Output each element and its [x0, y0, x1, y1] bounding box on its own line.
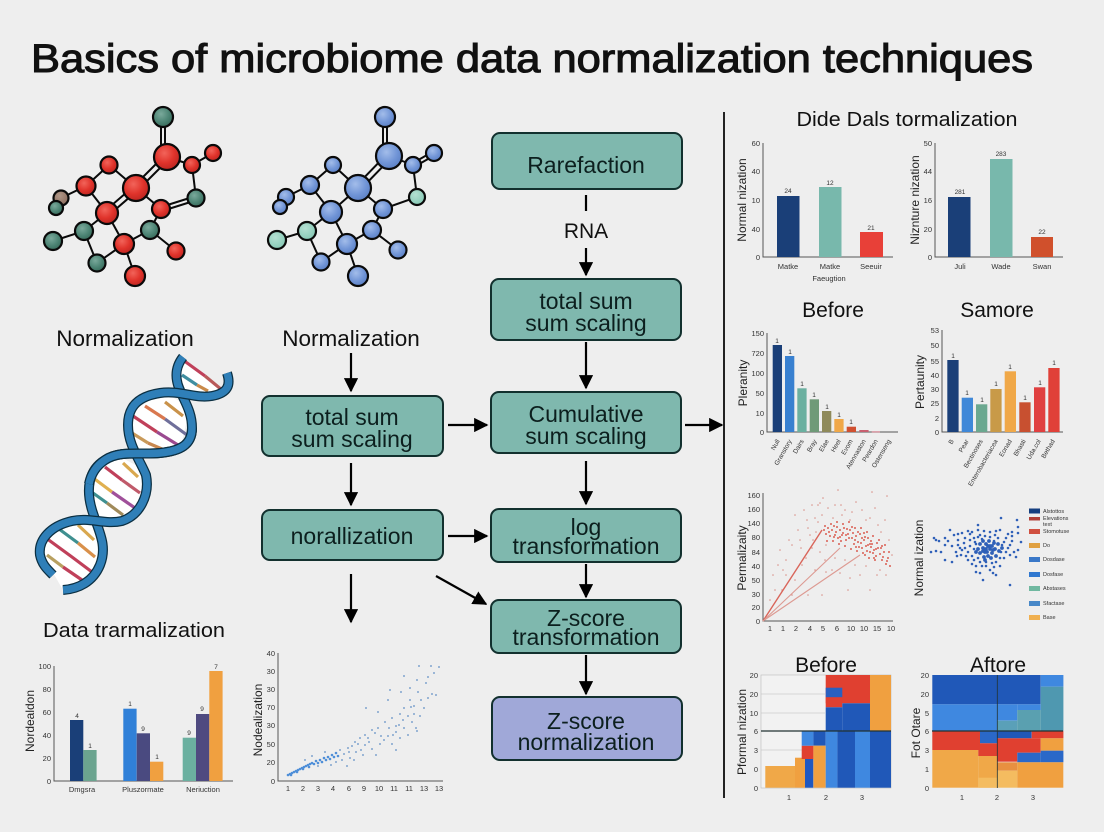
chart: red scatter with lines: 50 — [752, 576, 760, 585]
chart: samore bars: B — [947, 438, 956, 446]
heading: after heatmap: Aftore — [970, 654, 1026, 677]
flow box: log transformation — [491, 509, 681, 562]
chart: red scatter with lines: 1 — [781, 624, 785, 633]
heading: before: Before — [802, 299, 864, 322]
heading: normalization centre: Normalization — [282, 326, 420, 351]
chart: after heatmap: 1 — [960, 793, 964, 802]
chart: before heatmap: 3 — [754, 746, 758, 755]
icon: DNA double helix — [40, 357, 229, 590]
chart: samore bars: Enterobacteriacea — [967, 438, 1000, 488]
chart: red scatter with lines: 5 — [821, 624, 825, 633]
chart: before heatmap: 10 — [750, 709, 758, 718]
chart: samore bars: Uda.col — [1026, 438, 1043, 461]
chart: grouped bars: Pluszormate — [122, 785, 164, 794]
heading: before heatmap: Before — [795, 654, 857, 677]
chart: before bars: 720 — [751, 349, 764, 358]
chart: before heatmap: 20 — [750, 671, 758, 680]
chart: before heatmap: 1 — [787, 793, 791, 802]
chart: bottom scatter: 11 — [390, 784, 398, 793]
divider line — [723, 112, 725, 798]
y axis title: Permalizaity — [735, 525, 749, 591]
chart: samore bars: Pear — [958, 438, 971, 454]
heading: normalization left: Normalization — [56, 326, 194, 351]
chart: red scatter with lines: 20 — [752, 603, 760, 612]
chart: bottom scatter: 20 — [267, 758, 275, 767]
chart: red scatter with lines: 84 — [752, 548, 760, 557]
chart: top right bars: Juli — [954, 262, 966, 271]
chart: grouped bars: 7 — [214, 664, 218, 671]
chart: before bars — [736, 329, 898, 470]
chart: bottom scatter: 6 — [347, 784, 351, 793]
chart: grouped bars: 1 — [155, 754, 159, 761]
chart: before bars: 50 — [756, 389, 764, 398]
chart: top right bars — [908, 139, 1063, 271]
chart: grouped bars: 1 — [88, 743, 92, 750]
flow box: cumulative sum scaling: Cumulative — [528, 401, 644, 427]
chart: after heatmap: 0 — [925, 784, 929, 793]
chart: samore bars — [913, 326, 1063, 488]
chart: before bars: 10 — [756, 409, 764, 418]
flow box: z-score transformation — [491, 600, 681, 653]
chart: top left bars: 0 — [756, 253, 760, 262]
chart: before heatmap: 20 — [750, 690, 758, 699]
chart: samore bars: Eonad — [998, 438, 1014, 458]
chart: before bars: 0 — [760, 428, 764, 437]
flow box: total sum scaling right: total sum — [539, 288, 633, 314]
chart: grouped bars: 20 — [43, 754, 51, 763]
chart: blue cluster scatter with legend: Stomotuse — [1043, 529, 1069, 535]
flow box: log transformation: transformation — [512, 533, 660, 559]
chart: grouped bars: 0 — [47, 777, 51, 786]
flow box: z-score normalization: normalization — [518, 729, 654, 755]
chart: red scatter with lines: 160 — [747, 505, 760, 514]
flow box: z-score normalization — [492, 697, 682, 760]
chart: before heatmap: 0 — [754, 765, 758, 774]
chart: samore bars: 30 — [931, 385, 939, 394]
chart: before heatmap: 0 — [754, 784, 758, 793]
chart: before bars: Dairs — [792, 438, 806, 455]
chart: top right bars: 0 — [928, 253, 932, 262]
chart: blue cluster scatter with legend — [912, 508, 1069, 621]
y axis title: Pformal nization — [735, 689, 749, 775]
heading: samore: Samore — [960, 299, 1034, 322]
flow box: cumulative sum scaling — [491, 392, 681, 453]
chart: top right bars: 44 — [924, 167, 932, 176]
chart: bottom scatter: 13 — [435, 784, 443, 793]
chart: before bars: 150 — [751, 329, 764, 338]
chart: red scatter with lines: 1 — [768, 624, 772, 633]
chart: samore bars: 1 — [951, 353, 955, 360]
chart: red scatter with lines: 10 — [860, 624, 868, 633]
chart: after heatmap: 20 — [921, 690, 929, 699]
flow box: log transformation: log — [571, 514, 601, 540]
chart: red scatter with lines: 10 — [887, 624, 895, 633]
chart: before bars: 1 — [775, 338, 779, 345]
chart: before bars: 100 — [751, 369, 764, 378]
heading: right column: Dide Dals tormalization — [796, 109, 1018, 131]
chart: top left bars: 24 — [784, 188, 792, 195]
chart: samore bars: 1 — [994, 381, 998, 388]
chart: samore bars: 1 — [1052, 360, 1056, 367]
chart: bottom scatter: 30 — [267, 667, 275, 676]
chart: samore bars: 53 — [931, 326, 939, 335]
chart: top left bars: 21 — [867, 225, 875, 232]
chart: samore bars: 1 — [965, 390, 969, 397]
chart: top right bars: 50 — [924, 139, 932, 148]
chart: grouped bars: 60 — [43, 708, 51, 717]
y axis title: Pleranity — [736, 360, 750, 406]
icon: red and green molecule — [44, 107, 221, 286]
chart: top right bars: 20 — [924, 225, 932, 234]
chart: before bars: Elae — [818, 438, 831, 453]
chart: bottom scatter: 9 — [362, 784, 366, 793]
chart: before bars: 1 — [812, 392, 816, 399]
chart: before bars: 1 — [849, 419, 853, 426]
flow box: total sum scaling left — [262, 396, 443, 456]
chart: blue cluster scatter with legend: Dosfase — [1043, 572, 1063, 578]
chart: grouped bars: Neriuction — [186, 785, 220, 794]
chart: top right bars: 22 — [1038, 229, 1046, 236]
y axis title: Normal ization — [912, 520, 926, 596]
chart: after heatmap — [909, 671, 1063, 802]
y axis title: Niznture nization — [908, 155, 922, 245]
chart: grouped bars — [23, 662, 233, 794]
chart: red scatter with lines: 160 — [747, 491, 760, 500]
chart: after heatmap: 6 — [925, 727, 929, 736]
chart: samore bars: 50 — [931, 341, 939, 350]
chart: before bars: Null — [770, 438, 782, 452]
chart: top right bars: Wade — [991, 262, 1011, 271]
chart: top right bars: Swan — [1033, 262, 1051, 271]
chart: top left bars: 12 — [826, 180, 834, 187]
chart: before heatmap — [735, 671, 891, 802]
chart: top left bars: 40 — [752, 167, 760, 176]
chart: samore bars: 1 — [980, 397, 984, 404]
chart: red scatter with lines: 15 — [873, 624, 881, 633]
chart: bottom scatter: 0 — [271, 777, 275, 786]
flow box: z-score normalization: Z-score — [547, 708, 625, 734]
chart: top right bars: 16 — [924, 196, 932, 205]
chart: after heatmap: 2 — [995, 793, 999, 802]
chart: red scatter with lines: 80 — [752, 533, 760, 542]
chart: blue cluster scatter with legend: text — [1043, 522, 1052, 528]
chart: top left bars: Matke — [820, 262, 840, 271]
chart: samore bars: 0 — [935, 428, 939, 437]
chart: samore bars: 1 — [1023, 395, 1027, 402]
chart: before bars: Heel — [830, 438, 843, 454]
chart: before bars: 1 — [788, 349, 792, 356]
chart: red scatter with lines: 10 — [847, 624, 855, 633]
chart: before bars: Evom — [840, 438, 855, 456]
flow box: total sum scaling left: total sum — [305, 404, 399, 430]
chart: red scatter with lines: 30 — [752, 590, 760, 599]
chart: bottom scatter: 4 — [331, 784, 335, 793]
chart: grouped bars: 9 — [141, 726, 145, 733]
chart: before bars: 1 — [825, 404, 829, 411]
chart: before heatmap: 3 — [860, 793, 864, 802]
chart: top left bars — [735, 139, 893, 283]
chart: bottom scatter: 3 — [316, 784, 320, 793]
chart: before bars: 1 — [837, 412, 841, 419]
chart: bottom scatter: 11 — [405, 784, 413, 793]
flow box: total sum scaling right — [491, 279, 681, 340]
chart: bottom scatter: 13 — [420, 784, 428, 793]
chart: blue cluster scatter with legend: Elevations — [1043, 516, 1069, 522]
chart: before heatmap: 2 — [824, 793, 828, 802]
chart: bottom scatter: 40 — [267, 649, 275, 658]
chart: samore bars: Bhasti — [1013, 438, 1028, 458]
chart: red scatter with lines — [735, 490, 895, 633]
chart: bottom scatter: 2 — [301, 784, 305, 793]
flow box: total sum scaling left: sum scaling — [291, 426, 413, 452]
chart: top right bars: 281 — [955, 189, 966, 196]
chart: bottom scatter: 10 — [375, 784, 383, 793]
chart: after heatmap: 20 — [921, 671, 929, 680]
flow box: cumulative sum scaling: sum scaling — [525, 423, 647, 449]
arrows: flow connectors — [351, 195, 722, 694]
chart: samore bars: 1 — [1008, 364, 1012, 371]
chart: samore bars: 2 — [935, 414, 939, 423]
chart: samore bars: Bethad — [1040, 438, 1057, 460]
chart: before bars: Bray — [806, 438, 819, 454]
chart: blue cluster scatter with legend: Base — [1043, 615, 1056, 621]
chart: after heatmap: 3 — [925, 746, 929, 755]
flow box: rarefaction: Rarefaction — [527, 152, 645, 178]
chart: red scatter with lines: 6 — [835, 624, 839, 633]
y axis title: Pertaunity — [913, 355, 927, 409]
chart: top left bars: Faeugtion — [812, 274, 846, 283]
chart: grouped bars: 9 — [187, 730, 191, 737]
chart: blue cluster scatter with legend: Dosdase — [1043, 557, 1065, 563]
chart: blue cluster scatter with legend: Alstottos — [1043, 509, 1064, 515]
chart: blue cluster scatter with legend: Abstases — [1043, 586, 1066, 592]
chart: samore bars: 40 — [931, 371, 939, 380]
chart: samore bars: 1 — [1038, 380, 1042, 387]
chart: bottom scatter — [251, 649, 443, 793]
chart: grouped bars: Dmgsra — [69, 785, 96, 794]
chart: bottom scatter: 50 — [267, 740, 275, 749]
chart: red scatter with lines: 2 — [794, 624, 798, 633]
flow box: normalization left — [262, 510, 443, 560]
chart: before bars: Atennaston — [845, 438, 868, 470]
chart: before bars: Peardon — [861, 438, 880, 463]
chart: after heatmap: 5 — [925, 709, 929, 718]
chart: red scatter with lines: 40 — [752, 562, 760, 571]
chart: before bars: Granstory — [773, 438, 794, 467]
y axis title: Nodealization — [251, 684, 265, 756]
title: Basics of microbiome data normalization techniques — [31, 37, 1033, 81]
flow box: total sum scaling right: sum scaling — [525, 310, 647, 336]
chart: before bars: Ostenseng — [871, 438, 893, 469]
chart: before bars: 1 — [800, 381, 804, 388]
chart: bottom scatter: 30 — [267, 721, 275, 730]
y axis title: Fot Otare — [909, 707, 923, 758]
y axis title: Nordealdon — [23, 690, 37, 752]
chart: grouped bars: 9 — [200, 706, 204, 713]
chart: samore bars: Bectinoses — [963, 438, 985, 470]
chart: before heatmap: 6 — [754, 727, 758, 736]
chart: grouped bars: 100 — [38, 662, 51, 671]
chart: red scatter with lines: 0 — [756, 617, 760, 626]
flow box: normalization left: norallization — [291, 523, 413, 549]
chart: grouped bars: 80 — [43, 685, 51, 694]
label: RNA: RNA — [564, 220, 608, 243]
flow box: z-score transformation: transformation — [512, 624, 660, 650]
chart: samore bars: 55 — [931, 357, 939, 366]
y axis title: Normal nization — [735, 158, 749, 242]
chart: after heatmap: 1 — [925, 765, 929, 774]
icon: blue and teal molecule — [268, 107, 442, 286]
chart: red scatter with lines: 140 — [747, 519, 760, 528]
chart: top left bars: Matke — [778, 262, 798, 271]
chart: after heatmap: 3 — [1031, 793, 1035, 802]
chart: blue cluster scatter with legend: Do — [1043, 543, 1050, 549]
chart: blue cluster scatter with legend: Sfactase — [1043, 601, 1064, 607]
chart: grouped bars: 4 — [75, 713, 79, 720]
chart: top right bars: 283 — [996, 151, 1007, 158]
flow box: z-score transformation: Z-score — [547, 605, 625, 631]
chart: bottom scatter: 30 — [267, 685, 275, 694]
chart: bottom scatter: 70 — [267, 703, 275, 712]
chart: samore bars: 25 — [931, 399, 939, 408]
chart: red scatter with lines: 4 — [808, 624, 812, 633]
heading: data normalization: Data trarmalization — [43, 620, 225, 642]
chart: top left bars: 40 — [752, 225, 760, 234]
flow box: rarefaction — [492, 133, 682, 189]
chart: bottom scatter: 1 — [286, 784, 290, 793]
chart: grouped bars: 40 — [43, 731, 51, 740]
chart: top left bars: Seeuir — [860, 262, 882, 271]
chart: grouped bars: 1 — [128, 701, 132, 708]
chart: top left bars: 60 — [752, 139, 760, 148]
chart: top left bars: 10 — [752, 196, 760, 205]
